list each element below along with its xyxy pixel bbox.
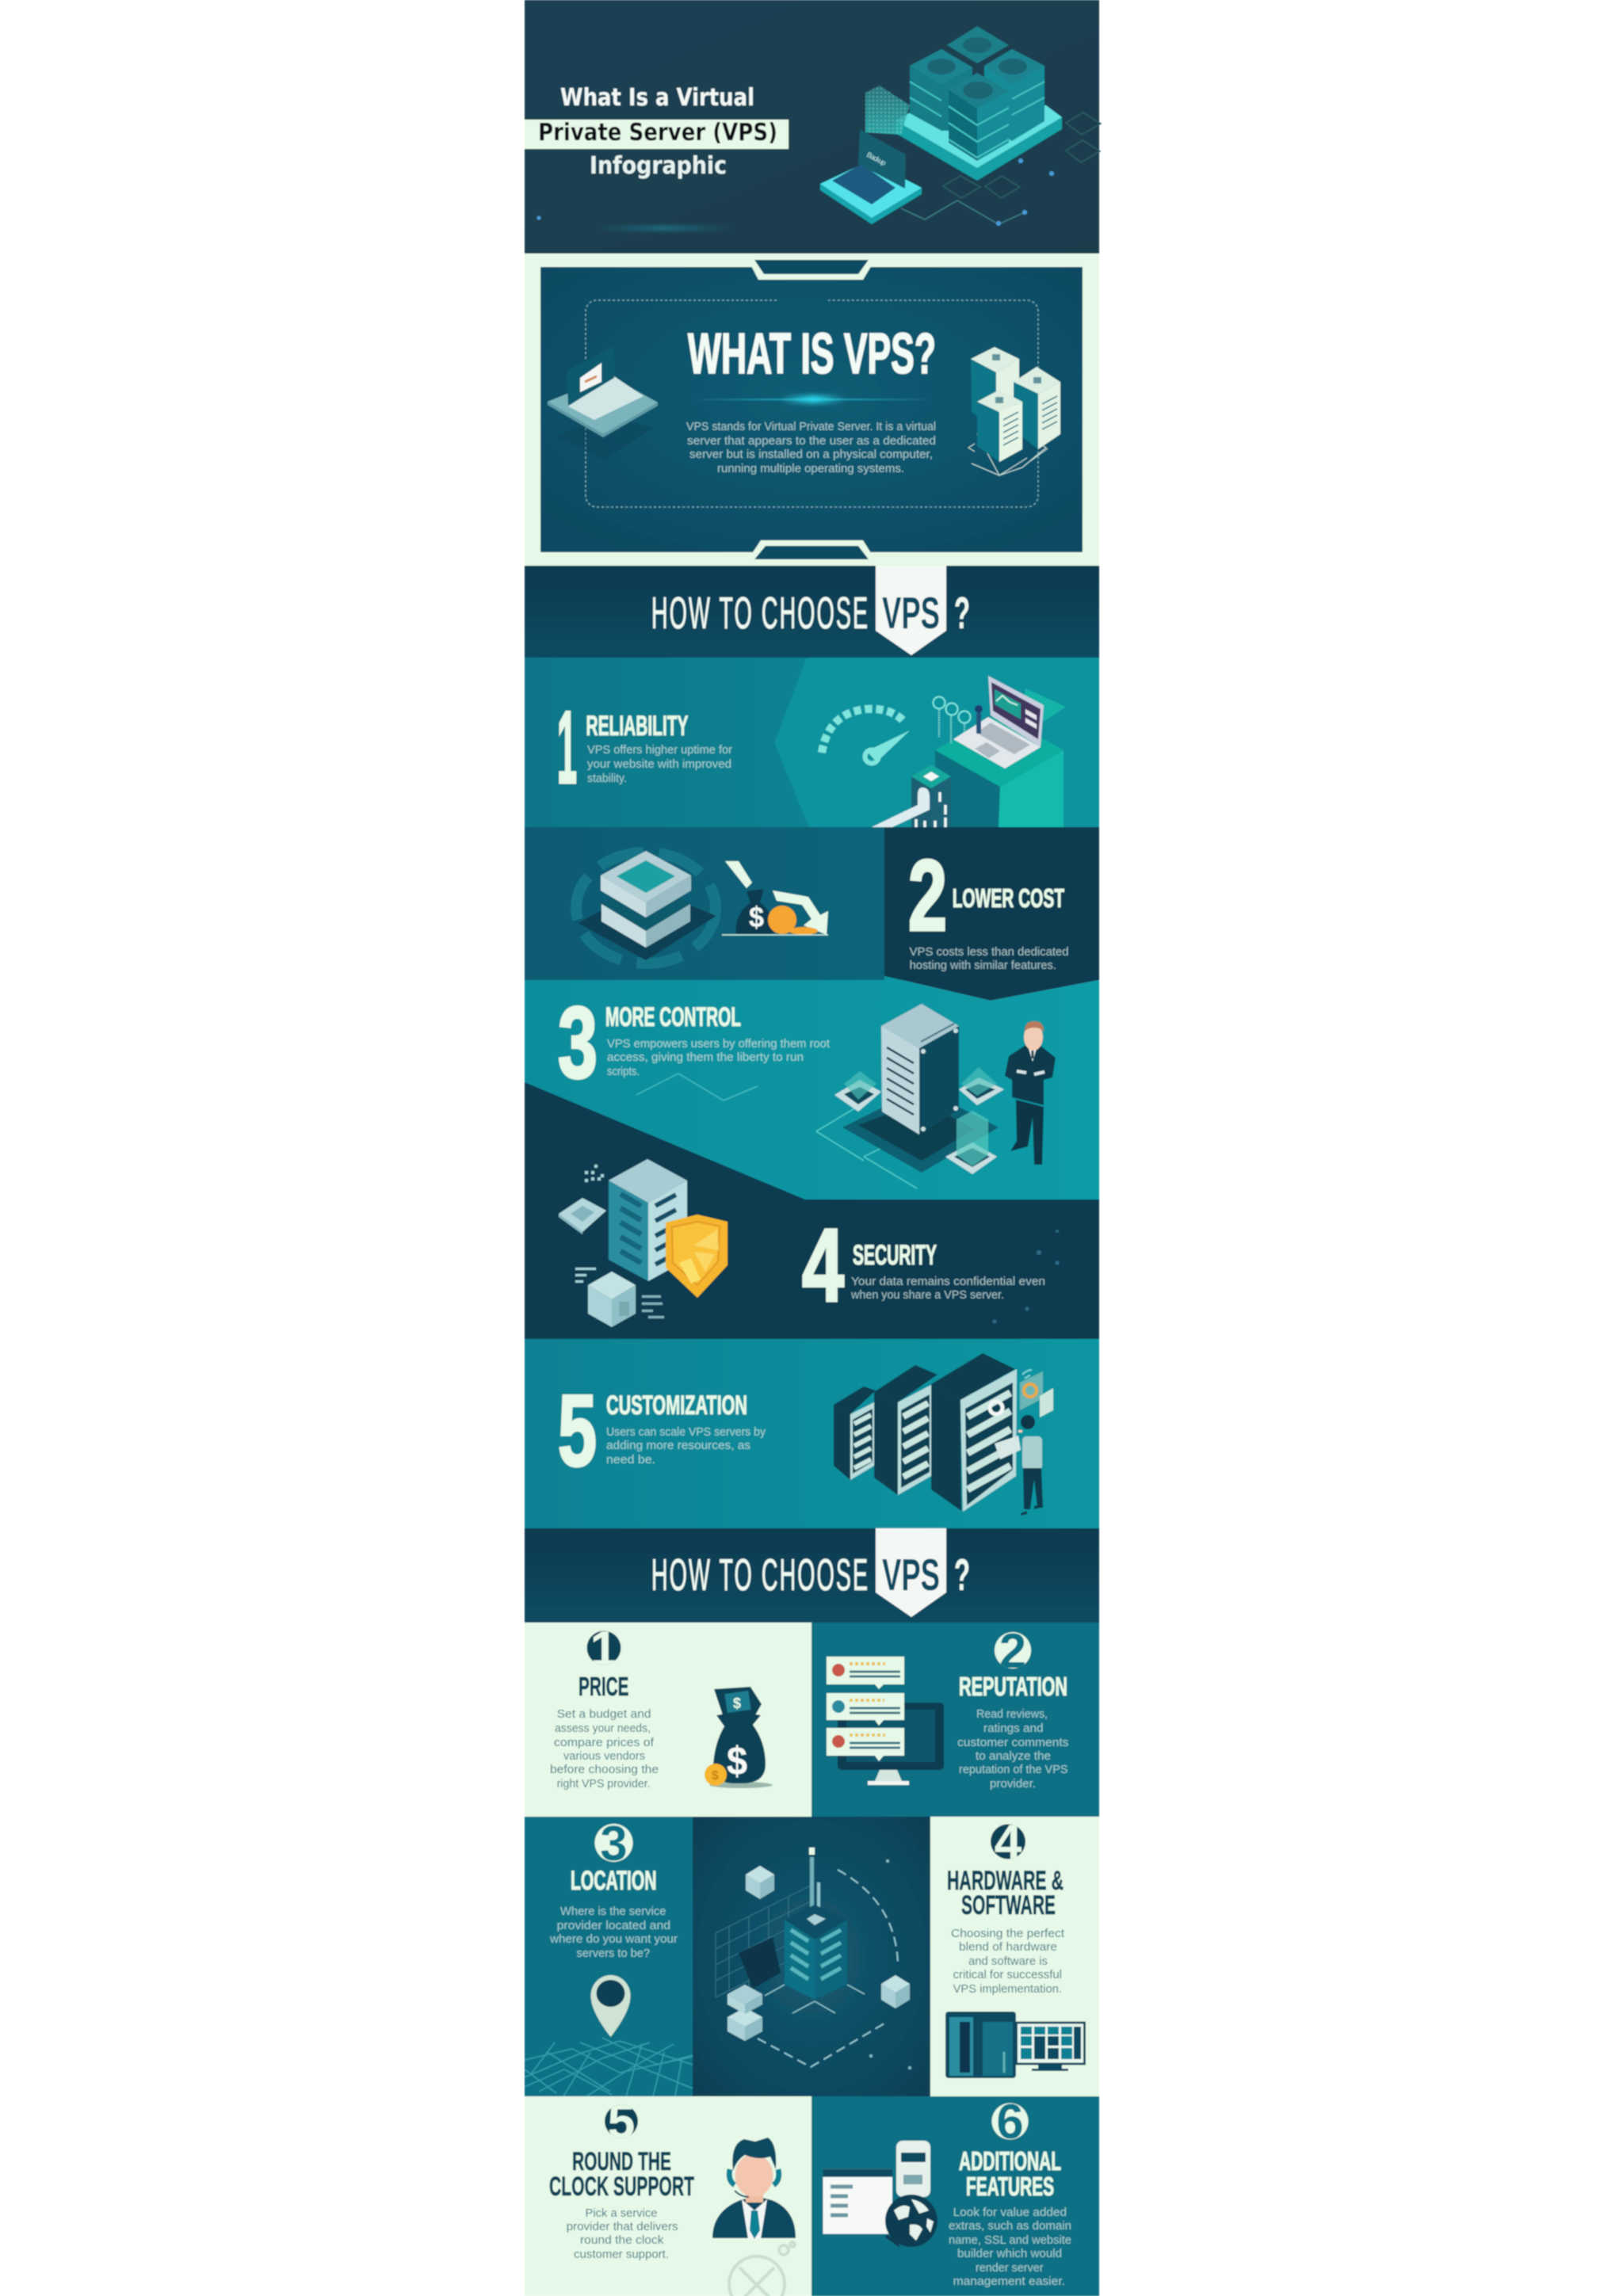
text: more control body: VPS empowers users by offering them root bbox=[607, 1037, 831, 1051]
panel: 4 security bbox=[525, 1082, 1099, 1339]
text: location body bbox=[549, 1905, 678, 1960]
text: VPS definition: VPS stands for Virtual Private Server. It is a virtual bbox=[686, 420, 936, 433]
heading text: HOW TO CHOOSE bbox=[651, 587, 868, 639]
icon: browser, server and globe bbox=[823, 2141, 938, 2247]
badge: number 6: 6 bbox=[996, 2095, 1024, 2149]
heading: additional features: FEATURES bbox=[966, 2172, 1054, 2201]
icon: chip bbox=[559, 1198, 606, 1234]
text: features body: extras, such as domain bbox=[949, 2219, 1071, 2233]
text: price body: compare prices of bbox=[554, 1736, 655, 1749]
text: support body: customer support. bbox=[574, 2248, 669, 2261]
icon: wire grid bbox=[716, 1886, 811, 1997]
question mark: ? bbox=[954, 588, 970, 639]
text: price body: right VPS provider. bbox=[557, 1777, 651, 1791]
text: reputation body: Read reviews, bbox=[976, 1707, 1048, 1721]
text: reputation body bbox=[957, 1707, 1068, 1791]
heading: additional features bbox=[959, 2146, 1061, 2201]
text: lower cost body bbox=[910, 945, 1069, 972]
icon: laptop bbox=[548, 346, 658, 460]
icon: money bag: $ bbox=[733, 1695, 741, 1711]
panel: 5 customization bbox=[525, 1339, 1099, 1528]
text: hardware body bbox=[951, 1927, 1065, 1996]
panel: 1 reliability bbox=[525, 658, 1099, 827]
icon: dashed routes bbox=[758, 1870, 898, 2067]
heading: reputation: REPUTATION bbox=[959, 1672, 1067, 1701]
badge: number 2: 2 bbox=[999, 1624, 1026, 1679]
title: Infographic bbox=[590, 152, 727, 180]
text: location body: where do you want your bbox=[549, 1932, 678, 1946]
badge: VPS shield: VPS bbox=[882, 1550, 940, 1600]
icon: server racks with technician bbox=[834, 1353, 1053, 1516]
panel: data center illustration bbox=[693, 1817, 930, 2096]
icon: money bag and falling arrow: $ bbox=[749, 901, 764, 933]
title highlight bar bbox=[525, 120, 789, 149]
text: hardware body: VPS implementation. bbox=[953, 1982, 1062, 1996]
icon: support agent bbox=[712, 2138, 796, 2239]
badge: number 6 bbox=[991, 2102, 1029, 2141]
decorative stars bbox=[992, 1230, 1059, 1323]
text: features body: name, SSL and website bbox=[949, 2233, 1071, 2247]
badge: number 5: 5 bbox=[608, 2095, 635, 2149]
text: price body bbox=[550, 1707, 659, 1791]
panel: dark cost block bbox=[884, 827, 1099, 1001]
icon: money bag and falling arrow bbox=[722, 861, 828, 935]
text: reputation body: to analyze the bbox=[976, 1749, 1051, 1763]
text: VPS definition: server that appears to the user as a dedicated bbox=[687, 434, 936, 448]
icon: header circuit lines bbox=[537, 113, 1101, 226]
text: reliability body: stability. bbox=[587, 772, 627, 785]
text: reliability body: VPS offers higher uptime for bbox=[587, 743, 732, 757]
badge: number 2 bbox=[994, 1630, 1032, 1670]
badge: number 1: 1 bbox=[590, 1622, 617, 1676]
icon: monitor bbox=[1016, 2023, 1084, 2071]
text: hardware body: and software is bbox=[968, 1955, 1048, 1968]
text: reliability body: your website with improved bbox=[587, 757, 731, 771]
icon: location pin bbox=[591, 1975, 631, 2037]
question mark: ? bbox=[954, 1550, 970, 1600]
icon: money bag: $ bbox=[727, 1739, 747, 1783]
icon: header laptop bbox=[820, 86, 922, 224]
number 5: 5 bbox=[558, 1375, 597, 1488]
text: lower cost body: hosting with similar features. bbox=[910, 959, 1056, 972]
text: security body bbox=[850, 1275, 1045, 1302]
text: VPS definition bbox=[686, 420, 936, 475]
text: customization body bbox=[606, 1425, 766, 1466]
text: lower cost body: VPS costs less than dedicated bbox=[910, 945, 1069, 959]
heading: location: LOCATION bbox=[571, 1866, 656, 1896]
heading: lower cost: LOWER COST bbox=[953, 883, 1064, 913]
badge: VPS shield bbox=[876, 566, 946, 655]
panel: hardware and software bbox=[930, 1815, 1099, 2096]
badge: VPS shield bbox=[876, 1528, 946, 1617]
heading: what is VPS: WHAT IS VPS? bbox=[688, 322, 936, 386]
text: price body: Set a budget and bbox=[557, 1707, 651, 1721]
panel: 3 more control bbox=[525, 976, 1099, 1199]
heading: hardware and software bbox=[947, 1866, 1064, 1920]
panel: header banner bbox=[525, 0, 1101, 254]
text: reliability body bbox=[587, 743, 732, 785]
decorative network line bbox=[636, 1074, 758, 1100]
icon: money bag bbox=[705, 1687, 773, 1788]
badge: VPS shield: VPS bbox=[882, 588, 940, 639]
heading: additional features: ADDITIONAL bbox=[959, 2146, 1061, 2176]
text: security body: Your data remains confidential even bbox=[851, 1275, 1045, 1288]
text: reputation body: provider. bbox=[990, 1777, 1036, 1791]
text: reputation body: reputation of the VPS bbox=[959, 1763, 1068, 1776]
text: customization body: Users can scale VPS servers by bbox=[606, 1425, 766, 1439]
text: location body: Where is the service bbox=[560, 1905, 666, 1918]
panel: 2 lower cost bbox=[525, 827, 1099, 1001]
icon: small tower with pipe bbox=[872, 765, 951, 827]
icon: data dots bbox=[575, 1165, 664, 1318]
heading: reliability: RELIABILITY bbox=[586, 711, 688, 742]
text: VPS definition: running multiple operating systems. bbox=[717, 462, 904, 475]
text: features body: builder which would bbox=[957, 2247, 1062, 2260]
heading: more control: MORE CONTROL bbox=[605, 1002, 741, 1032]
text: support body: Pick a service bbox=[585, 2206, 658, 2220]
text: location body: provider located and bbox=[557, 1919, 670, 1932]
text: price body: assess your needs, bbox=[555, 1722, 651, 1735]
panel: location bbox=[525, 1817, 693, 2096]
icon: cube bbox=[588, 1272, 636, 1327]
text: support body: round the clock bbox=[580, 2233, 664, 2247]
icon: header laptop: Backup bbox=[865, 151, 888, 167]
dashed inner frame bbox=[586, 300, 1038, 507]
text: security body: when you share a VPS server. bbox=[850, 1288, 1004, 1302]
icon: computer tower bbox=[945, 2012, 1016, 2078]
badge: number 3 bbox=[594, 1822, 634, 1863]
icon: speed gauge bbox=[822, 709, 910, 764]
text: VPS definition: server but is installed on a physical computer, bbox=[689, 448, 933, 461]
panel: round the clock support bbox=[525, 2095, 812, 2296]
text: more control body: access, giving them the liberty to run bbox=[607, 1051, 804, 1064]
badge: number 4 bbox=[990, 1824, 1026, 1860]
heading text: HOW TO CHOOSE bbox=[651, 1549, 868, 1600]
text: price body: before choosing the bbox=[550, 1763, 659, 1776]
badge: number 1 bbox=[586, 1630, 621, 1665]
heading: price: PRICE bbox=[579, 1672, 629, 1701]
panel: additional features bbox=[812, 2095, 1099, 2296]
panel: 1 reliability: 1 bbox=[557, 689, 577, 805]
text: price body: various vendors bbox=[563, 1749, 645, 1763]
icon: tower bbox=[765, 1848, 865, 2013]
text: customization body: need be. bbox=[606, 1453, 655, 1466]
text: hardware body: critical for successful bbox=[953, 1968, 1062, 1981]
icon: faded tools badge bbox=[729, 2242, 795, 2296]
text: support body bbox=[567, 2206, 678, 2261]
number 4: 4 bbox=[802, 1207, 844, 1323]
icon: cube right bbox=[881, 1975, 910, 2008]
text: more control body bbox=[607, 1037, 831, 1078]
icon: cube top bbox=[746, 1866, 774, 1899]
heading: round the clock support: ROUND THE bbox=[572, 2147, 671, 2176]
text: reputation body: customer comments bbox=[957, 1736, 1068, 1749]
icon: businessman with crossed arms bbox=[1005, 1021, 1056, 1165]
icon: server towers bbox=[968, 347, 1060, 475]
icon: stacked blocks bbox=[727, 1985, 762, 2041]
decorative sparks bbox=[869, 1859, 911, 2069]
text: features body: Look for value added bbox=[953, 2206, 1067, 2219]
header glow line bbox=[593, 227, 735, 230]
panel: how to choose heading 2 bbox=[525, 1528, 1099, 1623]
badge: number 5 bbox=[604, 2104, 639, 2138]
heading: hardware and software: SOFTWARE bbox=[961, 1890, 1056, 1920]
text: features body: render server bbox=[976, 2261, 1044, 2275]
icon: server with gold shield bbox=[609, 1159, 727, 1298]
icon: server stacks on platform bbox=[896, 26, 1062, 181]
heading: round the clock support: CLOCK SUPPORT bbox=[549, 2172, 694, 2202]
icon: server stack with rings bbox=[576, 851, 716, 963]
text: support body: provider that delivers bbox=[567, 2220, 678, 2233]
title: What Is a Virtual bbox=[560, 84, 754, 112]
icon: laptop on green tower bbox=[934, 676, 1066, 827]
badge: number 4: 4 bbox=[995, 1815, 1022, 1870]
heading: round the clock support bbox=[549, 2147, 694, 2202]
text: reputation body: ratings and bbox=[983, 1722, 1043, 1735]
icon: map lines bbox=[525, 2038, 693, 2096]
title bbox=[538, 84, 777, 180]
text: features body: management easier. bbox=[953, 2275, 1065, 2288]
icon: central server with chips bbox=[816, 1004, 1004, 1188]
text: more control body: scripts. bbox=[607, 1065, 640, 1078]
panel: what is VPS frame bbox=[525, 254, 1099, 566]
text: hardware body: blend of hardware bbox=[959, 1940, 1057, 1954]
number 2: 2 bbox=[908, 839, 947, 952]
title: Private Server (VPS) bbox=[538, 119, 777, 147]
tab: top connector bbox=[748, 260, 875, 280]
number 3: 3 bbox=[558, 986, 598, 1100]
heading: security: SECURITY bbox=[853, 1240, 937, 1271]
heading: hardware and software: HARDWARE & bbox=[947, 1866, 1064, 1896]
text: location body: servers to be? bbox=[577, 1947, 650, 1960]
panel: how to choose heading 1 bbox=[525, 566, 1099, 658]
panel: price bbox=[525, 1622, 812, 1817]
icon: money bag: $ bbox=[712, 1769, 719, 1783]
text: features body bbox=[949, 2206, 1071, 2288]
badge: number 3: 3 bbox=[600, 1817, 628, 1871]
text: hardware body: Choosing the perfect bbox=[951, 1927, 1065, 1940]
tab: bottom connector bbox=[748, 540, 875, 559]
glow divider bbox=[693, 395, 932, 403]
panel: reputation bbox=[812, 1623, 1099, 1817]
icon: monitor with review cards bbox=[827, 1657, 944, 1785]
text: customization body: adding more resources, as bbox=[606, 1439, 750, 1452]
heading: customization: CUSTOMIZATION bbox=[606, 1390, 747, 1421]
